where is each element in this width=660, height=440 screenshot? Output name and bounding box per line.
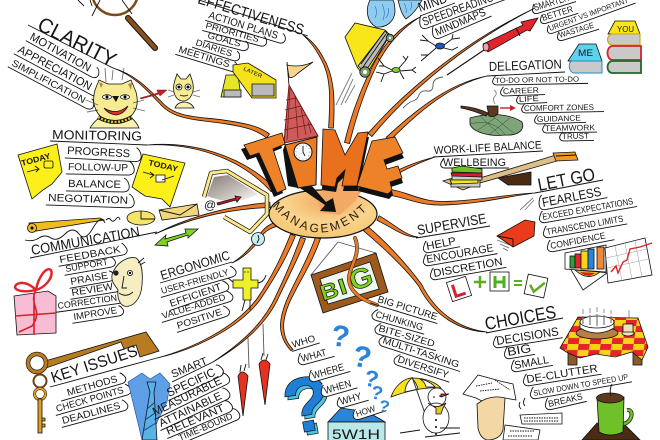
- item: to-do: TO-DO OR NOT TO-DO: [495, 75, 579, 85]
- icon: big sign: I: [335, 274, 350, 300]
- letter E: [357, 137, 404, 199]
- icon: blue brains: [367, 0, 422, 27]
- item: efficient: EFFICIENT: [168, 282, 223, 310]
- item: correction: CORRECTION: [57, 293, 118, 311]
- item: improve: IMPROVE: [73, 305, 118, 323]
- heading: key issues: KEY ISSUES: [49, 343, 140, 387]
- item: transcend limits: TRANSCEND LIMITS: [546, 214, 624, 237]
- icon: green mug on mat: [582, 384, 640, 440]
- icon: blue question marks: ?: [369, 382, 385, 405]
- group: mind: [416, 0, 505, 40]
- item: multi-tasking: MULTI-TASKING: [381, 335, 461, 371]
- item: wastage: WASTAGE: [558, 21, 595, 40]
- decorative motion lines: [336, 73, 534, 210]
- icon: magnifying glass: [78, 0, 155, 48]
- icon: clock dial on branch: [252, 232, 264, 246]
- branch: choices: [363, 226, 487, 332]
- icon: table with birthday cake: [560, 307, 648, 365]
- letter I tower: [283, 137, 317, 188]
- heading: communication: COMMUNICATION: [30, 223, 141, 258]
- item: help: HELP: [425, 235, 457, 253]
- item: slow down: SLOW DOWN TO SPEED UP: [533, 372, 629, 398]
- central image: time management: [241, 62, 404, 239]
- item: career: CAREER: [503, 86, 539, 96]
- icon: you book stack: YOU: [617, 25, 634, 34]
- group: effectiveness: [175, 0, 308, 73]
- item: big: BIG: [506, 341, 532, 359]
- item: measurable: MEASURABLE: [150, 373, 224, 419]
- branch: work-life balance: [377, 157, 435, 186]
- chart: line chart: [605, 238, 652, 283]
- icon: envelope: [159, 204, 199, 220]
- item: priorities: PRIORITIES: [204, 20, 261, 44]
- icon: green double arrow: [155, 229, 198, 246]
- branch: smarter: [368, 8, 535, 137]
- item: encourage: ENCOURAGE: [425, 242, 494, 266]
- icon: arrow between cats: [140, 90, 167, 99]
- item: praise: PRAISE: [70, 270, 109, 288]
- item: what: WHAT: [300, 348, 328, 365]
- item: diversify: DIVERSIFY: [396, 354, 450, 381]
- item: appreciation: APPRECIATION: [16, 44, 94, 93]
- item: de-clutter: DE-CLUTTER: [526, 363, 599, 386]
- icon: snowman with umbrella: [391, 377, 460, 437]
- icon: red pencil arrow: [403, 18, 538, 108]
- item: value-added: VALUE-ADDED: [161, 292, 227, 321]
- item: negotiation: NEGOTIATION: [48, 192, 128, 207]
- item: goals: GOALS: [206, 30, 242, 49]
- group: ergonomic: [158, 247, 237, 332]
- icon: yellow cross figure: [228, 268, 266, 311]
- branch: big picture: [349, 238, 377, 305]
- item: life: LIFE: [519, 94, 539, 104]
- item: deadlines: DEADLINES: [61, 401, 122, 427]
- group: key issues: [49, 343, 157, 427]
- heading: work-life balance: WORK-LIFE BALANCE: [434, 139, 542, 157]
- text: management: MANAGEMENT: [272, 201, 365, 232]
- group: who what where: [289, 332, 386, 421]
- icon: later books: [221, 63, 276, 98]
- branch: ergonomic: [232, 222, 278, 263]
- group: choices: [483, 302, 632, 411]
- icon: computer monitor: [204, 171, 267, 232]
- item: small: SMALL: [513, 354, 550, 372]
- branch: monitoring: [147, 144, 275, 192]
- heading: ergonomic: ERGONOMIC: [158, 247, 232, 283]
- icon: seesaw of books: [443, 152, 578, 190]
- item: action plans: ACTION PLANS: [207, 9, 279, 42]
- icon: brown key: [28, 332, 159, 372]
- item: positive: POSITIVE: [176, 307, 224, 332]
- letter T: [241, 133, 286, 197]
- item: review: REVIEW: [71, 281, 115, 299]
- branch: delegation: [386, 76, 487, 141]
- item: breaks: BREAKS: [547, 391, 584, 409]
- item: fearless: FEARLESS: [541, 184, 603, 210]
- icon: blue question marks: ?: [329, 319, 352, 354]
- icon: blue question marks: [329, 319, 391, 417]
- branch: clarity: [113, 68, 270, 138]
- item: meetings: MEETINGS: [177, 44, 231, 70]
- item: attainable: ATTAINABLE: [157, 390, 224, 430]
- item: who: WHO: [291, 333, 317, 351]
- icon: bald man face: [112, 258, 145, 306]
- icon: pipe and slippers: [461, 90, 523, 135]
- branch: key issues: [157, 234, 295, 358]
- arrow: [300, 186, 336, 212]
- item: chunking: CHUNKING: [374, 309, 424, 333]
- heading: let go: LET GO: [536, 164, 597, 195]
- item: wellbeing: WELLBEING: [443, 157, 506, 169]
- branch: supervise: [377, 216, 418, 237]
- icon: blue question marks: ?: [362, 364, 381, 393]
- icon: small keys: [34, 374, 46, 433]
- chart: pie chart sheet: [570, 268, 607, 290]
- heading: big picture: BIG PICTURE: [376, 294, 439, 323]
- item: better: BETTER: [541, 4, 575, 23]
- heading: supervise: SUPERVISE: [416, 210, 487, 238]
- icon: gift box: [14, 269, 56, 335]
- heading: smart: SMART: [170, 355, 210, 381]
- heading: choices: CHOICES: [483, 302, 558, 334]
- item: support: SUPPORT: [65, 257, 109, 274]
- icon: large yellow cat: [86, 68, 145, 128]
- group: smart: [148, 355, 241, 440]
- item: exceed expectations: EXCEED EXPECTATIONS: [542, 196, 634, 222]
- icon: big sign: B: [317, 276, 342, 306]
- icon: you book stack: [608, 21, 641, 73]
- icon: 5w1h house: [328, 408, 385, 440]
- icon: at sign: @: [204, 198, 216, 212]
- item: guidance: GUIDANCE: [537, 113, 581, 124]
- clock: [294, 143, 312, 161]
- item: balance: BALANCE: [68, 178, 121, 191]
- group: big picture: [370, 293, 463, 382]
- heading: monitoring: MONITORING: [52, 127, 142, 144]
- item: diaries: DIARIES: [194, 37, 234, 59]
- icon: today note left: TODAY: [20, 151, 52, 168]
- icon: computer mouse: [127, 211, 155, 225]
- item: confidence: CONFIDENCE: [549, 230, 606, 251]
- item: progress: PROGRESS: [67, 145, 130, 160]
- item: methods: METHODS: [66, 374, 119, 399]
- item: specific: SPECIFIC: [164, 365, 218, 400]
- icon: blue shirt and tie: [128, 373, 170, 440]
- branch: let go: [388, 189, 535, 205]
- icon: today note left: [18, 144, 62, 199]
- item: where: WHERE: [311, 362, 346, 382]
- item: how: HOW: [355, 403, 377, 419]
- item: simplification: SIMPLIFICATION: [10, 58, 87, 106]
- icon: hanging carrots: [238, 324, 270, 416]
- branch: effectiveness: [303, 35, 334, 128]
- icon: blue question marks: ?: [350, 340, 374, 376]
- group: supervise: [416, 210, 506, 281]
- icon: red book: [497, 220, 535, 251]
- group: delegation: [487, 56, 604, 141]
- icon: yellow book on wheels: [345, 23, 394, 77]
- item: when: WHEN: [323, 379, 353, 397]
- group: communication: [30, 223, 157, 323]
- group: work-life balance: [433, 139, 543, 169]
- item: discretion: DISCRETION: [432, 256, 504, 280]
- item: bite-sized: BITE-SIZED: [377, 323, 436, 350]
- icon: l plus h equals tick: [446, 272, 548, 302]
- item: motivation: MOTIVATION: [28, 31, 93, 75]
- flag: [287, 62, 313, 85]
- group: smarter: [530, 0, 636, 42]
- item: why: WHY: [339, 391, 363, 408]
- icon: big sign: G: [345, 260, 377, 297]
- group: clarity: [8, 13, 120, 111]
- icon: green neuron: [376, 56, 416, 82]
- chart: bar chart: [565, 245, 606, 272]
- branch: mind: [344, 17, 420, 144]
- management disc: [269, 190, 377, 238]
- branch: smart: [213, 237, 305, 362]
- icon: today note right: TODAY: [148, 158, 180, 174]
- group: monitoring: [46, 127, 147, 208]
- item: mindmaps: MINDMAPS: [433, 7, 488, 39]
- icon: blue neuron: [420, 34, 460, 61]
- icon: today note right: [132, 154, 185, 207]
- icon: big sign: [311, 242, 388, 313]
- icon: blue question marks: ?: [377, 396, 391, 417]
- icon: me book: ME: [578, 48, 593, 58]
- item: feedback: FEEDBACK: [59, 244, 122, 266]
- branch: communication: [155, 202, 270, 234]
- tower roof: [284, 85, 318, 143]
- item: trust: TRUST: [562, 132, 589, 141]
- icon: small yellow cat: [168, 74, 200, 108]
- item: big: [503, 340, 535, 360]
- item: comfort zones: COMFORT ZONES: [524, 103, 594, 113]
- icon: me book: [568, 44, 602, 73]
- branch: who what where: [280, 237, 320, 351]
- item: follow-up: FOLLOW-UP: [68, 162, 128, 174]
- icon: later books: LATER: [242, 66, 263, 80]
- group: let go: [535, 164, 637, 253]
- icon: pen: [25, 217, 120, 241]
- heading: delegation: DELEGATION: [489, 56, 562, 74]
- letter M: [321, 129, 369, 192]
- item: relevant: RELEVANT: [164, 402, 227, 438]
- item: check points: CHECK POINTS: [55, 385, 125, 415]
- item: teamwork: TEAMWORK: [545, 123, 596, 133]
- peach burst on disc: [318, 170, 362, 215]
- item: user-friendly: USER-FRIENDLY: [160, 267, 230, 296]
- item: decisions: DECISIONS: [495, 324, 560, 348]
- heading: clarity: CLARITY: [34, 13, 120, 72]
- icon: crumpled papers and cup: [463, 375, 562, 440]
